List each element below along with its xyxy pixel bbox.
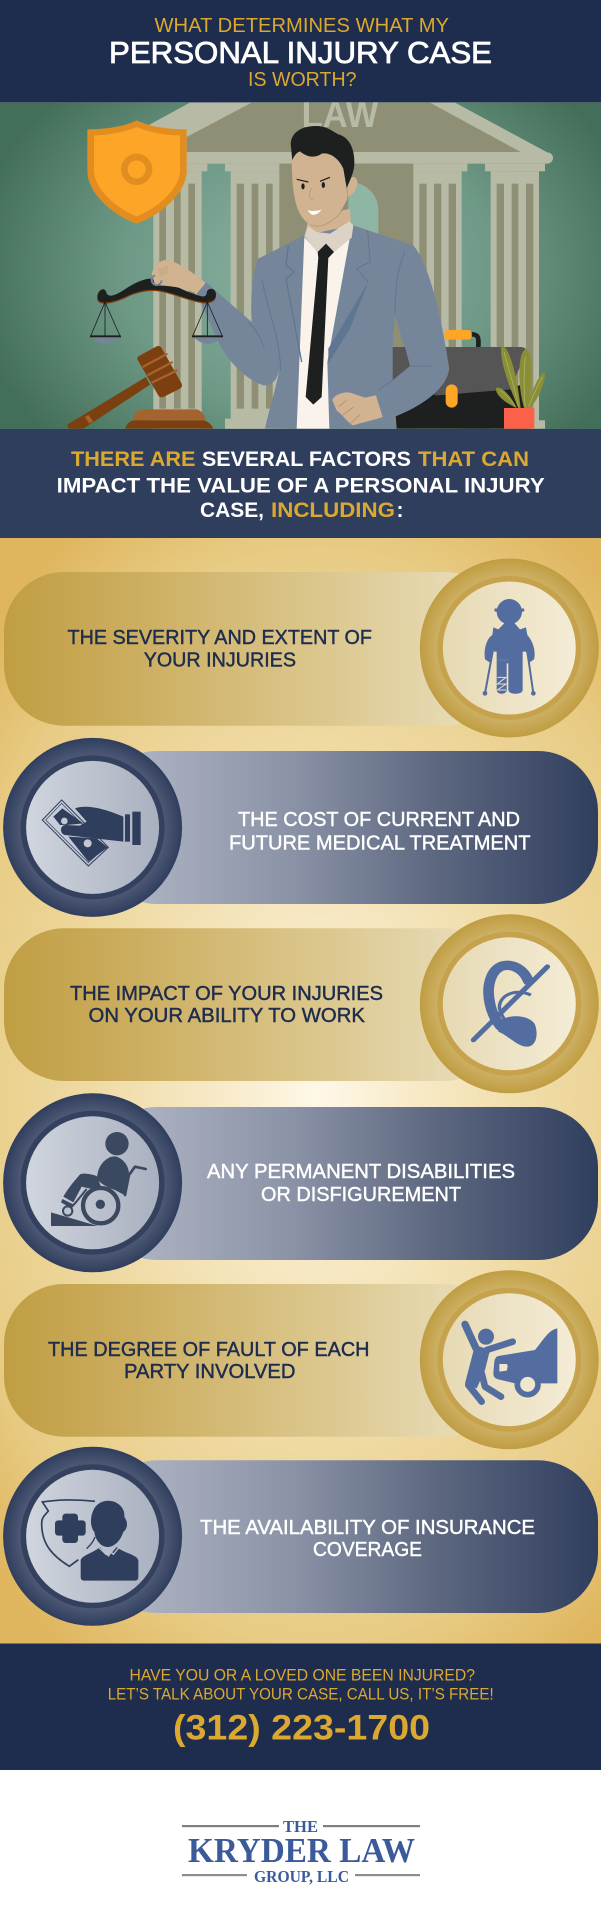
factor 6 text: THE AVAILABILITY OF INSURANCE	[200, 1516, 535, 1539]
factor 2: medical cost	[3, 738, 598, 917]
logo: Kryder Law Group: THE	[283, 1817, 318, 1836]
heading line: is worth: IS WORTH?	[248, 68, 356, 91]
factor 2 text: THE COST OF CURRENT AND	[238, 808, 520, 831]
factor 1 text	[68, 626, 372, 672]
factor 6 text	[200, 1516, 535, 1561]
figure: lawyer	[197, 126, 449, 429]
factor 3: ability to work	[4, 914, 599, 1093]
factor 4 text	[207, 1160, 515, 1206]
factor 4 badge	[3, 1093, 182, 1272]
icon: wheelchair on ramp	[51, 1132, 146, 1226]
factor 3 text	[70, 982, 383, 1027]
factor 5 text: THE DEGREE OF FAULT OF EACH	[48, 1338, 370, 1361]
icon: plant	[496, 345, 545, 429]
heading line: what determines what my: WHAT DETERMINES WHAT MY	[154, 14, 449, 37]
icon: ear with slash	[473, 965, 547, 1047]
logo: Kryder Law Group: KRYDER LAW	[188, 1831, 415, 1870]
icon: gavel	[67, 346, 213, 429]
panel: header	[0, 0, 601, 102]
panel: call to action	[0, 1644, 601, 1770]
icon: person on crutches	[483, 599, 536, 696]
factor 5: degree of fault	[4, 1270, 599, 1449]
call to action text	[108, 1666, 494, 1703]
icon: insured person with shield	[42, 1500, 138, 1581]
call to action text: LET’S TALK ABOUT YOUR CASE, CALL US, IT’S FREE!	[108, 1684, 494, 1703]
icon: briefcase	[393, 330, 527, 429]
factor 3 badge	[420, 914, 599, 1093]
intro line 1: SEVERAL FACTORS	[202, 448, 411, 471]
panel: intro statement	[0, 429, 601, 538]
intro line 1	[71, 448, 529, 471]
courthouse building: LAW	[302, 93, 379, 135]
panel: factors background	[0, 538, 601, 1644]
icon: scales of justice	[90, 260, 223, 344]
factor 1: severity of injuries	[4, 558, 599, 738]
call to action text: HAVE YOU OR A LOVED ONE BEEN INJURED?	[130, 1666, 475, 1685]
factor 6 text: COVERAGE	[313, 1538, 422, 1561]
intro line 3: INCLUDING	[271, 499, 395, 522]
factor 2 badge	[3, 738, 182, 917]
phone number: (312) 223-1700	[173, 1708, 430, 1748]
factor 1 badge	[420, 558, 599, 738]
factor 4 text: ANY PERMANENT DISABILITIES	[207, 1160, 515, 1183]
logo: Kryder Law Group: GROUP, LLC	[254, 1867, 349, 1886]
factor 1 text: YOUR INJURIES	[144, 649, 296, 672]
intro line 2: IMPACT THE VALUE OF A PERSONAL INJURY	[57, 474, 545, 497]
panel: hero illustration	[0, 93, 601, 430]
factor 6 badge	[3, 1447, 182, 1626]
intro line 3: CASE,	[200, 499, 264, 522]
courthouse building	[143, 93, 553, 429]
icon: hand with money	[42, 800, 141, 866]
icon: car hitting pedestrian	[465, 1324, 557, 1402]
intro line 1: THAT CAN	[418, 448, 529, 471]
logo: Kryder Law Group	[182, 1817, 420, 1886]
factor 3 text: THE IMPACT OF YOUR INJURIES	[70, 982, 383, 1005]
factor 1 text: THE SEVERITY AND EXTENT OF	[68, 626, 372, 649]
intro line 3	[200, 499, 404, 522]
factor 5 text: PARTY INVOLVED	[124, 1360, 296, 1383]
factor 4 text: OR DISFIGUREMENT	[261, 1183, 461, 1206]
factor 5 badge	[420, 1270, 599, 1449]
intro line 3: :	[396, 499, 404, 522]
factor 2 text: FUTURE MEDICAL TREATMENT	[229, 831, 531, 854]
factor 4: permanent disabilities	[3, 1093, 598, 1272]
factor 2 text	[229, 808, 531, 854]
factor 6: insurance coverage	[3, 1447, 598, 1626]
factor 3 text: ON YOUR ABILITY TO WORK	[88, 1004, 365, 1027]
factor 5 text	[48, 1338, 370, 1383]
icon: shield	[87, 120, 187, 224]
heading line: personal injury case: PERSONAL INJURY CASE	[109, 36, 492, 70]
intro line 1: THERE ARE	[71, 448, 196, 471]
